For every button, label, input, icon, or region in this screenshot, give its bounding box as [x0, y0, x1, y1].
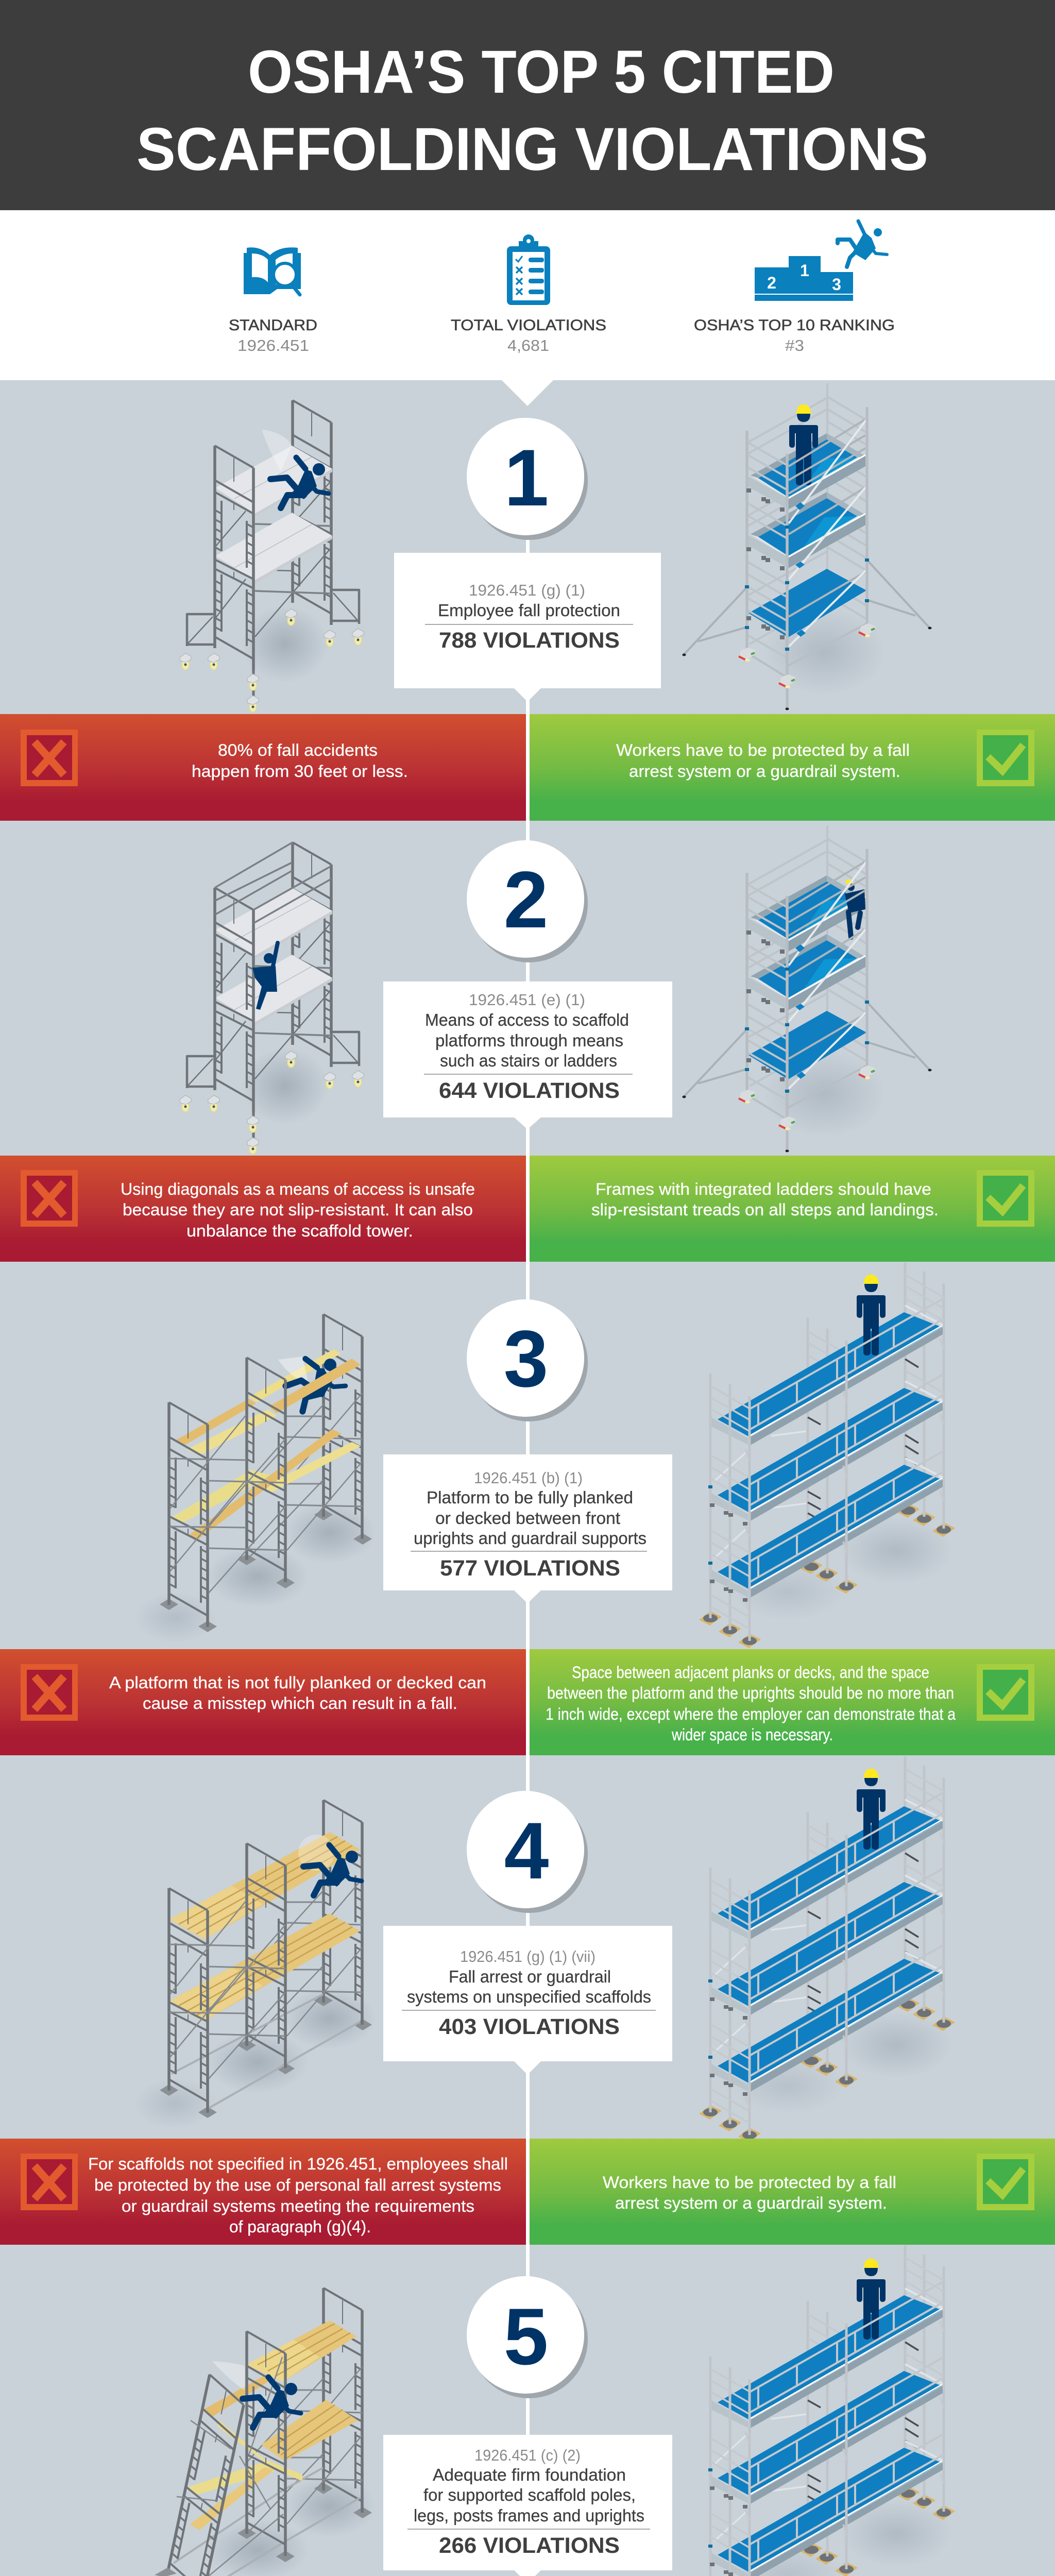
- red bar: hazard 1: 80% of fall accidents: [218, 741, 378, 759]
- callout: citation 3: uprights and guardrail supports: [414, 1529, 646, 1548]
- callout: citation 1: Employee fall protection: [438, 601, 620, 620]
- green bar: remedy 3: between the platform and the uprights should be no more than: [547, 1684, 954, 1702]
- icon: podium with falling figure: 3: [832, 275, 841, 294]
- callout: citation 3: 577 VIOLATIONS: [440, 1556, 620, 1581]
- callout: citation 5: for supported scaffold poles,: [423, 2485, 636, 2504]
- number badge 5: 5: [504, 2292, 548, 2382]
- panel: violation 1: [0, 383, 1055, 821]
- icon: clipboard checklist: [507, 234, 550, 305]
- callout: citation 3: Platform to be fully planked: [427, 1488, 633, 1507]
- callout: citation 4: 403 VIOLATIONS: [439, 2014, 620, 2039]
- panel: violation 2: [0, 825, 1055, 1262]
- green bar: remedy 3: wider space is necessary.: [671, 1725, 833, 1744]
- red bar: hazard 4: For scaffolds not specified in 1926.451, employees shall: [88, 2155, 508, 2173]
- illustration: unsafe scaffold with falling worker: [180, 400, 364, 712]
- callout: citation 3: [383, 1454, 672, 1603]
- callout: citation 5: 266 VIOLATIONS: [439, 2533, 620, 2558]
- red bar: hazard 1: happen from 30 feet or less.: [192, 762, 408, 781]
- callout: citation 1: 1926.451 (g) (1): [469, 581, 585, 599]
- callout: citation 3: 1926.451 (b) (1): [474, 1469, 583, 1487]
- illustration: scaffold with no guardrail: [134, 1800, 376, 2129]
- green bar: remedy 1: Workers have to be protected by a fall: [616, 741, 910, 759]
- red bar: hazard 2: [0, 1156, 526, 1262]
- illustration: safe tower with integrated ladder: [682, 825, 931, 1152]
- callout: citation 2: 644 VIOLATIONS: [439, 1078, 620, 1103]
- callout: citation 4: 1926.451 (g) (1) (vii): [460, 1947, 595, 1965]
- total violations label: 4,681: [507, 336, 549, 354]
- green bar: remedy 4: Workers have to be protected by a fall: [603, 2173, 896, 2192]
- red bar: hazard 1: [0, 714, 526, 821]
- panel: violation 3: [0, 1262, 1055, 1755]
- number badge 1: [467, 418, 588, 540]
- callout: citation 5: [383, 2435, 672, 2576]
- green bar: remedy 2: [530, 1156, 1055, 1262]
- ranking label: #3: [785, 336, 804, 354]
- panel: violation 4: [0, 1756, 1055, 2245]
- red bar: hazard 2: unbalance the scaffold tower.: [186, 1222, 413, 1240]
- callout: citation 3: or decked between front: [435, 1509, 620, 1528]
- callout: citation 2: platforms through means: [435, 1031, 623, 1050]
- number badge 4: [467, 1791, 588, 1913]
- green bar: remedy 3: [530, 1649, 1055, 1755]
- total violations label: TOTAL VIOLATIONS: [451, 317, 606, 334]
- ranking label: [694, 317, 895, 354]
- icon: podium with falling figure: [755, 221, 887, 301]
- number badge 1: 1: [504, 433, 549, 523]
- number badge 5: [467, 2276, 588, 2398]
- callout: citation 2: Means of access to scaffold: [425, 1010, 629, 1029]
- red bar: hazard 4: [0, 2139, 526, 2245]
- panel: violation 5: [0, 2245, 1055, 2576]
- callout: citation 1: [394, 553, 661, 702]
- green bar: remedy 2: Frames with integrated ladders should have: [595, 1180, 931, 1198]
- title: OSHA’S TOP 5 CITED: [248, 38, 835, 106]
- callout: citation 5: legs, posts frames and uprights: [414, 2506, 644, 2525]
- illustration: collapsing scaffold with bricks: [155, 2288, 376, 2576]
- title: SCAFFOLDING VIOLATIONS: [137, 115, 928, 183]
- red bar: hazard 2: Using diagonals as a means of access is unsafe: [121, 1180, 475, 1198]
- green bar: remedy 3: 1 inch wide, except where the employer can demonstrate that a: [546, 1705, 956, 1723]
- number badge 2: 2: [504, 855, 548, 945]
- green bar: remedy 1: [530, 714, 1055, 821]
- illustration: fully decked scaffold: [699, 1262, 955, 1648]
- icon: book with magnifier: [244, 247, 301, 295]
- total violations label: [451, 317, 606, 354]
- red bar: hazard 3: cause a misstep which can result in a fall.: [143, 1694, 457, 1713]
- green bar: remedy 4: arrest system or a guardrail system.: [615, 2194, 887, 2212]
- callout: citation 2: 1926.451 (e) (1): [469, 991, 585, 1009]
- number badge 2: [467, 840, 588, 962]
- standard label: 1926.451: [237, 336, 309, 354]
- panel: key facts: [0, 210, 1055, 380]
- callout: citation 4: [383, 1926, 672, 2075]
- illustration: unsafe scaffold with worker climbing diagonals: [180, 842, 364, 1154]
- title banner: [0, 0, 1055, 210]
- red bar: hazard 4: be protected by the use of personal fall arrest systems: [94, 2176, 501, 2194]
- callout: citation 5: 1926.451 (c) (2): [474, 2446, 581, 2464]
- green bar: remedy 1: arrest system or a guardrail system.: [629, 762, 900, 781]
- red bar: hazard 3: A platform that is not fully planked or decked can: [109, 1673, 486, 1692]
- illustration: partly planked scaffold: [134, 1314, 376, 1643]
- red bar: hazard 4: or guardrail systems meeting the requirements: [122, 2197, 474, 2215]
- icon: podium with falling figure: 1: [800, 261, 809, 280]
- icon: podium with falling figure: 2: [767, 274, 776, 292]
- illustration: guarded scaffold: [699, 1756, 955, 2142]
- callout: citation 4: systems on unspecified scaffolds: [407, 1987, 651, 2006]
- standard label: [229, 317, 317, 354]
- illustration: safe tower with worker: [682, 383, 931, 710]
- illustration: scaffold on firm foundation: [699, 2245, 955, 2576]
- ranking label: OSHA’S TOP 10 RANKING: [694, 317, 895, 334]
- red bar: hazard 4: of paragraph (g)(4).: [229, 2217, 371, 2236]
- green bar: remedy 3: Space between adjacent planks or decks, and the space: [572, 1663, 929, 1682]
- number badge 4: 4: [504, 1806, 549, 1896]
- number badge 3: [467, 1299, 588, 1421]
- callout: citation 5: Adequate firm foundation: [433, 2465, 626, 2484]
- red bar: hazard 2: because they are not slip-resistant. It can also: [123, 1200, 473, 1219]
- green bar: remedy 4: [530, 2139, 1055, 2245]
- title: [137, 38, 928, 183]
- arrow: header pointer: [502, 380, 553, 406]
- callout: citation 1: 788 VIOLATIONS: [439, 628, 620, 653]
- centre spine: [526, 515, 530, 2576]
- green bar: remedy 2: slip-resistant treads on all steps and landings.: [591, 1200, 939, 1219]
- number badge 3: 3: [504, 1314, 548, 1404]
- callout: citation 2: such as stairs or ladders: [440, 1051, 617, 1070]
- callout: citation 2: [383, 981, 672, 1129]
- standard label: STANDARD: [229, 317, 317, 334]
- red bar: hazard 3: [0, 1649, 526, 1755]
- callout: citation 4: Fall arrest or guardrail: [449, 1967, 611, 1986]
